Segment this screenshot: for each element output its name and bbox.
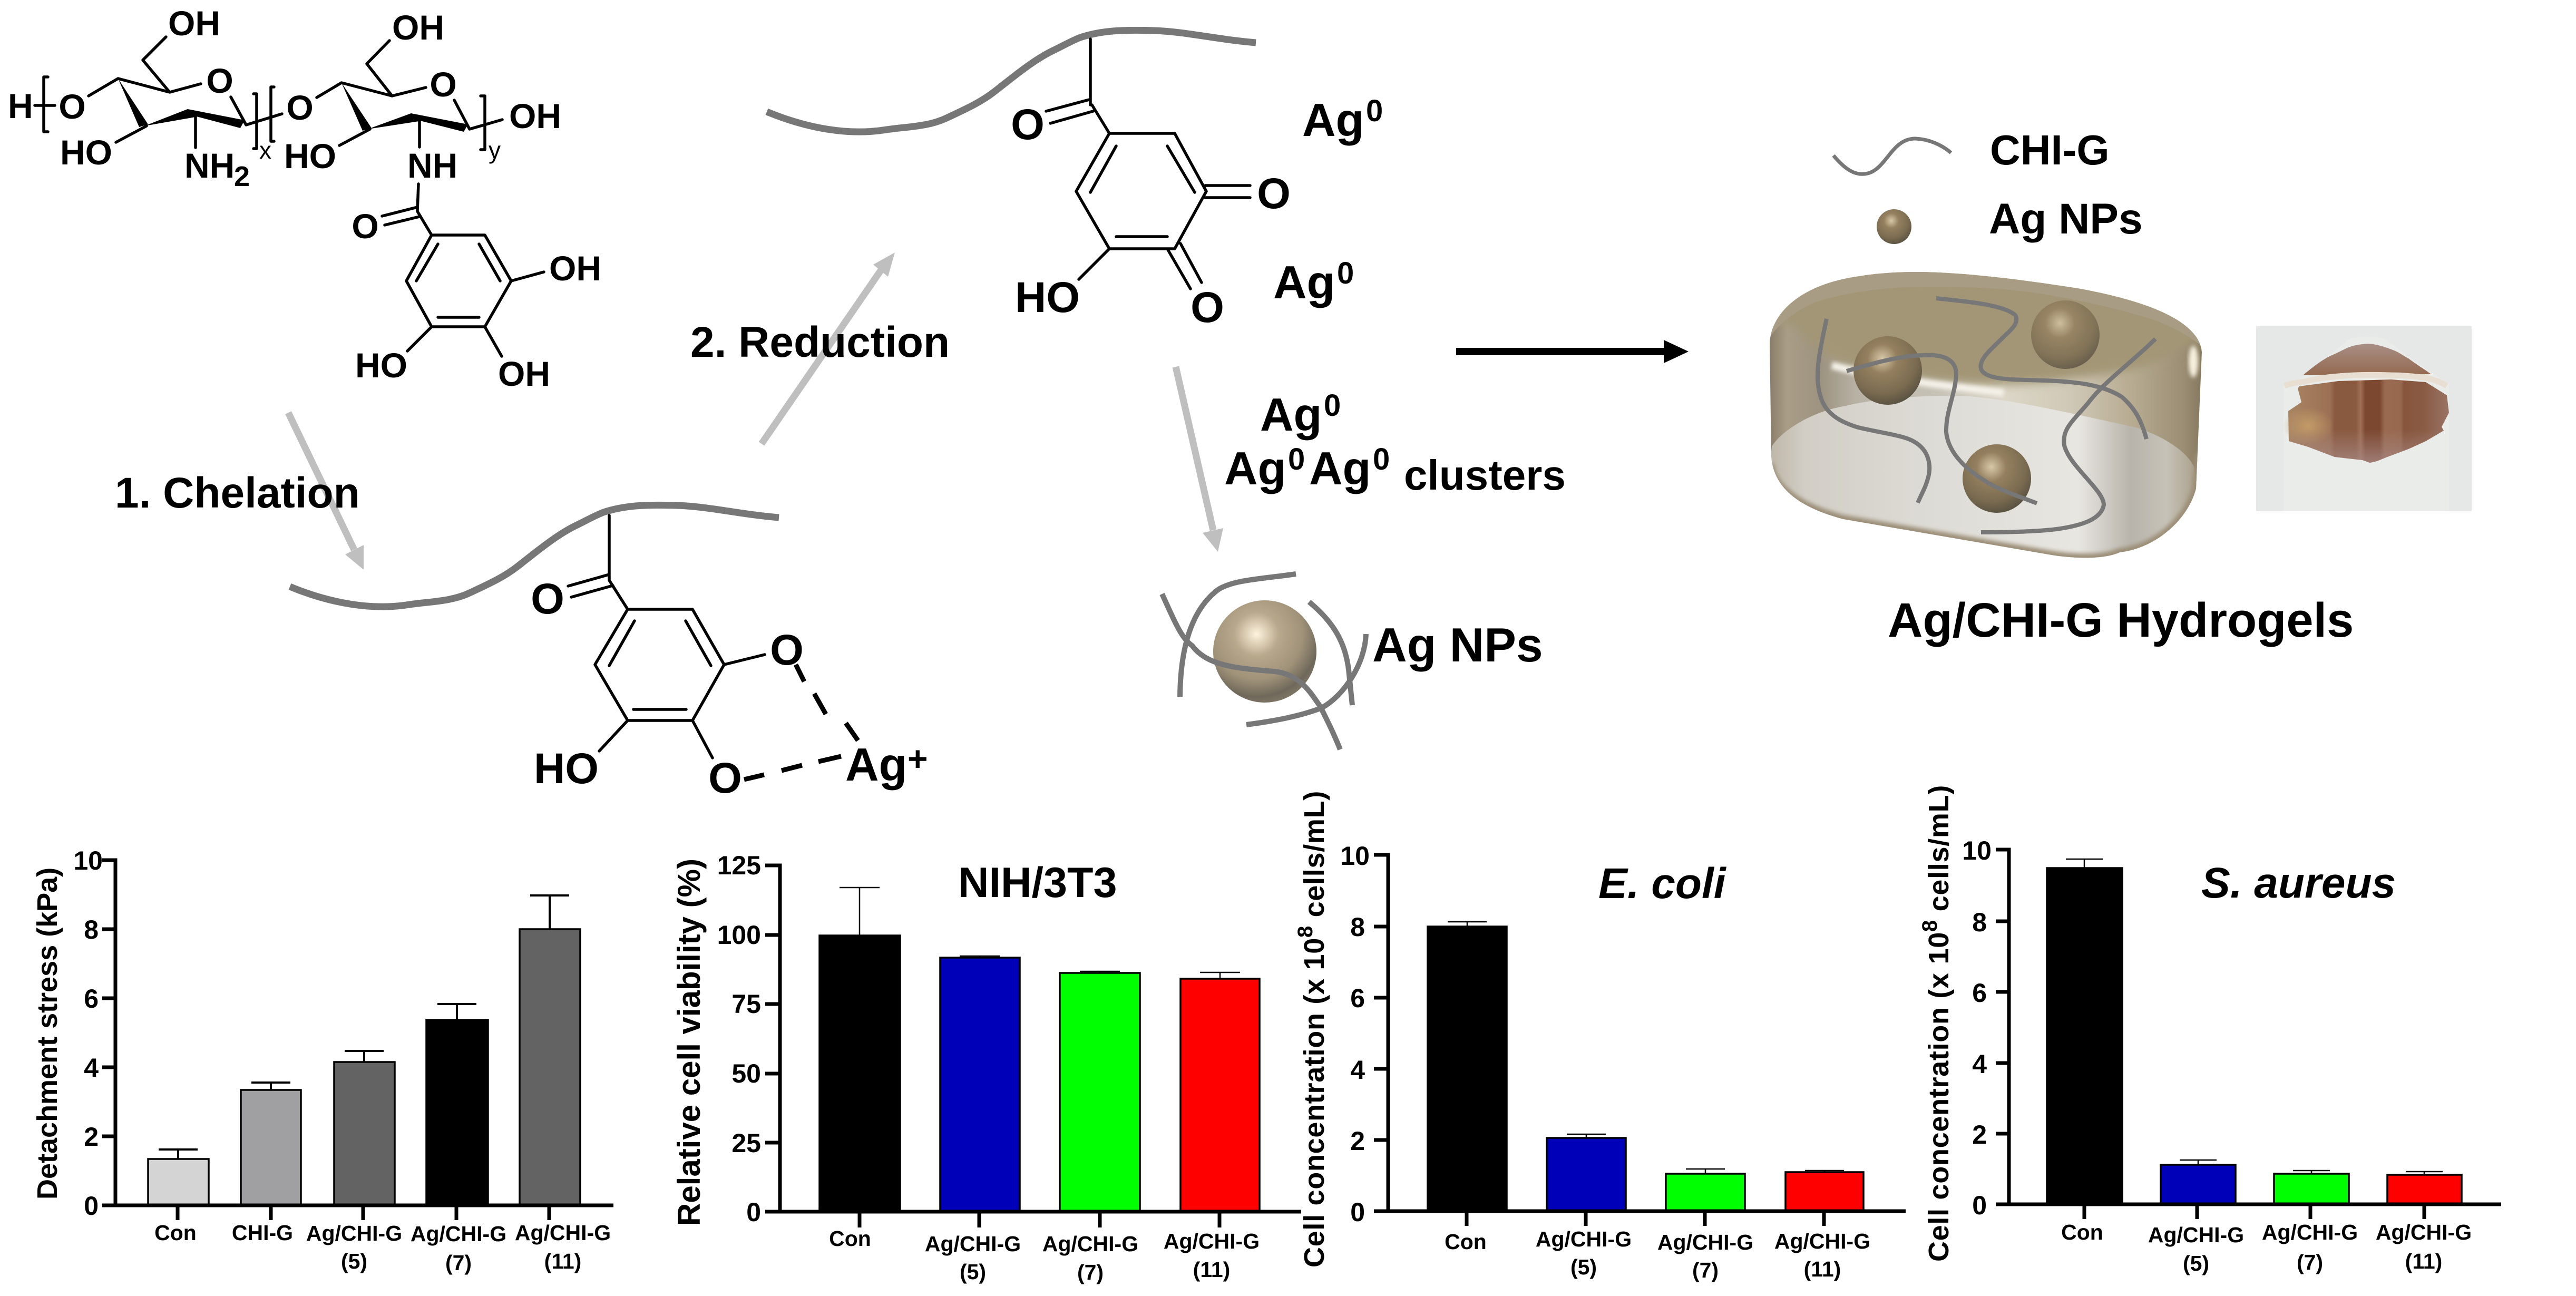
atom labels: OH [509,96,561,135]
y tick labels [1340,841,1370,1227]
legend text: Ag NPs: Ag NPs [1989,195,2143,243]
quinone structure with Ag0 [767,30,1383,332]
error bars [2066,859,2443,1175]
atom labels: 2 [234,161,250,192]
error bars [1448,922,1844,1174]
y tick labels: 6 [84,984,99,1014]
y tick labels: 25 [731,1128,761,1158]
legend sphere [1877,209,1911,244]
atom labels: Ag [845,738,907,791]
y tick labels: 2 [84,1122,99,1152]
y-axis title: cells/mL) [1299,791,1330,925]
atom labels: HO [534,745,599,793]
label: 2. Reduction: 2. Reduction [690,318,950,366]
atom labels: O [1011,101,1045,149]
atom labels: O [286,88,314,127]
y tick labels: 4 [1972,1049,1987,1079]
y-axis title: 8 [1918,920,1941,932]
gel surfaces [1771,272,2201,558]
y tick labels [717,851,761,1227]
bonds [568,515,765,758]
y tick labels: 10 [1962,836,1992,865]
atom labels [8,4,601,393]
gel body [1770,272,2202,558]
label: 1. Chelation: 1. Chelation [115,469,360,517]
atom labels: HO [60,133,112,172]
Ag0 lower: Ag [1273,256,1335,308]
tube [2284,337,2449,511]
x labels: Ag/CHI-G [1774,1229,1870,1253]
label: Ag/CHI-G Hydrogels: Ag/CHI-G Hydrogels [1888,593,2354,647]
x labels: (5) [960,1260,986,1284]
chart: S. aureus [1918,785,2501,1275]
axes [1996,850,2501,1219]
x labels: Con [829,1226,871,1251]
error bars [840,888,1240,979]
atom labels: O [531,575,564,623]
atom labels: OH [168,4,220,43]
y tick labels: 6 [1972,978,1987,1008]
x labels: (5) [2183,1251,2209,1275]
x labels: CHI-G [232,1221,293,1245]
arrow: to Ag NPs [1176,367,1223,552]
y tick labels: 100 [717,920,761,950]
label: Ag0 clusters: Ag [1309,442,1371,494]
label: Ag NPs: Ag NPs [1372,619,1543,672]
atom labels: O [352,207,379,246]
x labels: Con [2061,1220,2103,1244]
x labels: (11) [1193,1258,1230,1282]
black arrow [1456,340,1689,363]
x labels: Ag/CHI-G [2148,1223,2244,1247]
axes [1374,855,1906,1226]
hydrogel photo [2256,326,2472,511]
y tick labels: 10 [1340,841,1370,871]
label: Ag0 clusters: Ag [1224,442,1286,494]
arrow: reduction [762,252,895,444]
Ag0 top: Ag [1302,94,1364,146]
x labels [1445,1227,1870,1282]
hydrogel illustration [1770,272,2202,558]
atom labels: OH [549,249,601,288]
label: Ag0 clusters [1224,388,1566,499]
chart: NIH/3T3 viability [671,851,1301,1284]
atom labels: x [259,137,271,164]
bars [2047,868,2462,1204]
sphere [1213,600,1316,703]
x labels: Ag/CHI-G [411,1222,506,1246]
label: Ag0 clusters: 0 [1324,388,1341,423]
atom labels: y [489,137,501,164]
x labels: (11) [2405,1249,2442,1273]
tan patch [2283,407,2334,445]
atom labels: O [1257,170,1291,218]
y-axis title: Cell concentration (x 10 [1923,932,1955,1262]
photo background [2256,326,2472,511]
label: Ag0 clusters: 0 [1288,442,1305,476]
chart title: NIH/3T3 [958,859,1117,907]
atom labels: HO [284,137,336,176]
atom labels: + [908,739,928,778]
bottom fade [2288,379,2449,463]
atom labels [1011,101,1291,332]
y tick labels [73,846,103,1221]
atom labels: O [58,87,86,126]
gel chains [1818,298,2155,532]
atom labels: HO [1015,274,1080,321]
backbone bonds [35,37,544,356]
y tick labels: 8 [1350,912,1365,942]
y tick labels: 4 [84,1053,99,1083]
atom labels: O [206,61,233,100]
chart title: S. aureus [2201,859,2396,907]
atom labels: H [8,86,33,125]
x labels [829,1226,1260,1284]
x labels: (7) [2297,1250,2323,1274]
x labels: (11) [544,1249,581,1273]
legend [1833,126,2143,244]
x labels: (7) [1692,1258,1719,1282]
legend curve: CHI-G [1833,139,1951,174]
y-axis title: Relative cell viability (%) [671,859,707,1226]
chart: E. coli [1294,791,1906,1282]
bars [1428,927,1863,1211]
bars [148,929,580,1205]
y-axis title: Cell concentration (x 10 [1299,938,1330,1268]
label: Ag0 clusters: 0 [1373,442,1390,476]
x labels: Con [1445,1230,1487,1254]
gel nanoparticles [1853,336,1922,405]
atom labels: O [770,626,804,674]
chart: detachment stress [32,846,613,1275]
x labels: Ag/CHI-G [1536,1227,1632,1251]
x labels [154,1221,611,1275]
y tick labels: 2 [1972,1120,1987,1149]
error bars [159,895,569,1159]
atom labels [531,575,928,802]
y tick labels: 0 [84,1191,99,1221]
x labels: Ag/CHI-G [306,1221,402,1245]
bars [819,936,1260,1212]
x labels: Ag/CHI-G [1657,1230,1753,1254]
chelated structure with Ag+ [290,505,928,802]
arrow: chelation [288,413,364,570]
polymer chain [290,505,779,607]
y tick labels: 4 [1350,1055,1365,1085]
x labels: (11) [1804,1257,1841,1281]
y tick labels: 8 [84,915,99,944]
x labels: (7) [1077,1260,1104,1284]
y tick labels: 0 [1972,1191,1987,1220]
x labels [2061,1220,2472,1275]
polymer chain [767,30,1256,132]
y tick labels: 50 [731,1059,761,1088]
atom labels: O [1191,284,1224,332]
y tick labels: 125 [717,851,761,880]
chains [1162,574,1366,749]
y tick labels: 0 [746,1197,761,1227]
atom labels: NH [184,146,235,185]
separation band [2285,375,2447,386]
x labels: Ag/CHI-G [515,1221,611,1245]
axes [102,860,613,1220]
x labels: Ag/CHI-G [1042,1232,1138,1256]
y tick labels: 8 [1972,908,1987,937]
y-axis title: cells/mL) [1923,785,1955,920]
gel lower body [2288,379,2449,463]
atom labels: OH [392,8,444,47]
y-axis title: Detachment stress (kPa) [32,868,63,1200]
x labels: Ag/CHI-G [925,1232,1021,1256]
x labels: Ag/CHI-G [2376,1220,2472,1244]
x labels: (7) [445,1251,472,1275]
y tick labels [1962,836,1992,1220]
atom labels: OH [498,354,550,393]
Ag nanoparticle with chains [1162,574,1366,749]
CHI-G chemical structure [8,4,601,393]
x labels: Con [154,1221,197,1245]
coordination dashes [744,665,858,779]
legend text: CHI-G: CHI-G [1990,126,2110,173]
y tick labels: 2 [1350,1126,1365,1156]
label: Ag0 clusters: Ag [1260,388,1322,441]
label: Ag0 clusters: clusters [1404,452,1566,499]
atom labels: NH [407,146,457,185]
x labels: (5) [341,1249,367,1273]
axes [765,865,1301,1227]
atom labels: O [708,754,742,802]
y tick labels: 6 [1350,983,1365,1013]
Ag0 top: 0 [1366,94,1383,128]
x labels: (5) [1570,1255,1597,1279]
y tick labels: 10 [73,846,103,875]
chart title: E. coli [1598,860,1727,908]
y tick labels: 0 [1350,1197,1365,1227]
wedge bonds [118,79,468,132]
y-axis title: 8 [1294,925,1317,938]
atom labels: HO [355,346,407,385]
y tick labels: 75 [731,989,761,1019]
bonds [1046,39,1250,289]
x labels: Ag/CHI-G [2262,1220,2358,1244]
x labels: Ag/CHI-G [1164,1229,1260,1253]
gel dome [2303,344,2431,375]
Ag0 lower: 0 [1337,256,1354,290]
atom labels: O [430,65,457,104]
